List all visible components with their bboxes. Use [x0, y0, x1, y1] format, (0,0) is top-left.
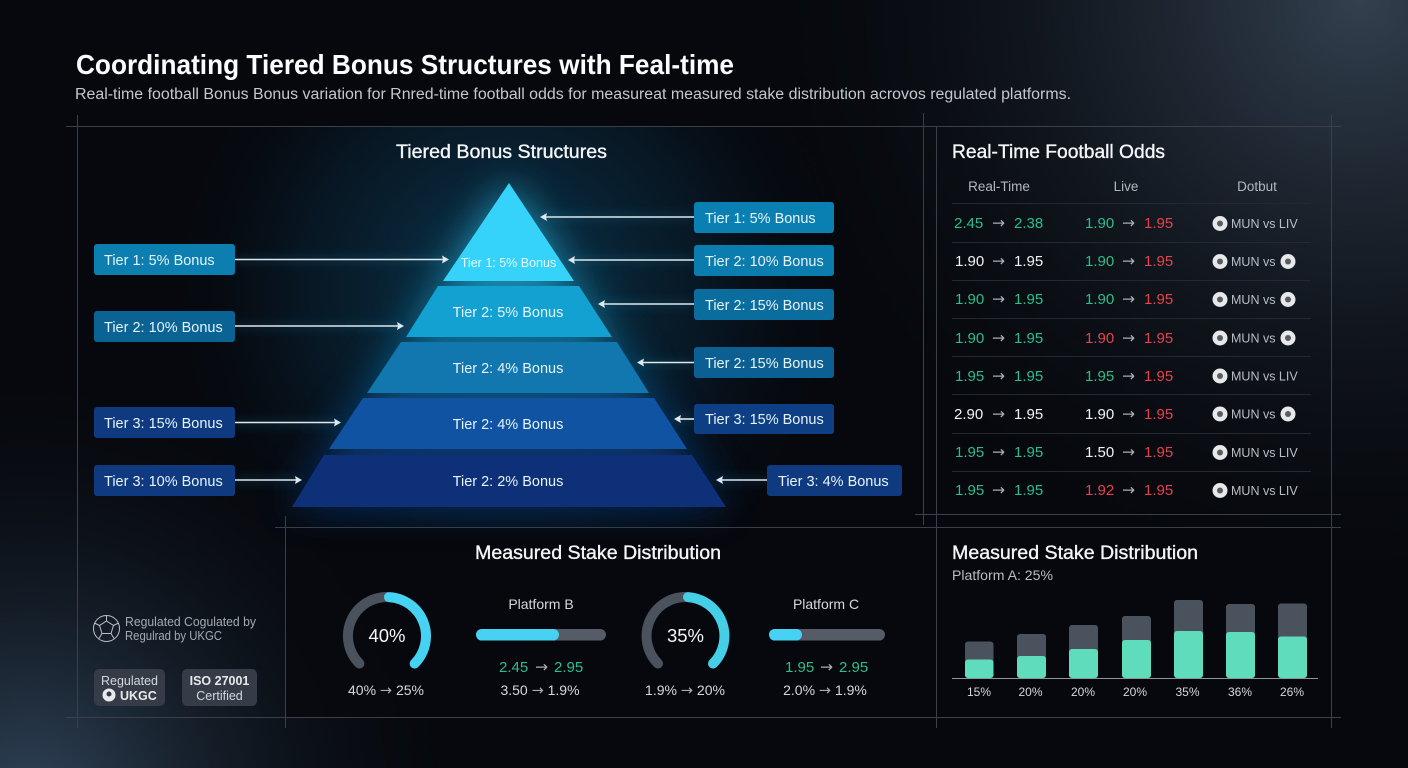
panel: tiered bonus structures: [94, 142, 902, 507]
subheading: platform A: Platform A: 25%: [952, 568, 1053, 583]
row 4: 1.90: [1085, 330, 1114, 347]
bar 1: [965, 642, 994, 699]
row 2: [955, 252, 1296, 270]
label: tier 2 left: [94, 311, 235, 342]
row 1: 1.90: [1085, 215, 1114, 232]
platform C bar: →: [820, 658, 833, 676]
label: tier 2 15 percent right: [694, 289, 834, 320]
platform B bar: 2.95: [554, 659, 583, 676]
row 7: →: [1122, 443, 1135, 461]
table header: Dotbut: [1237, 179, 1277, 194]
heading: tiered bonus structures: Tiered Bonus Structures: [396, 142, 607, 163]
label: tier 3 4 percent right: [767, 465, 902, 496]
platform B bar: 3.50 → 1.9%: [500, 682, 580, 699]
row 2: MUN vs: [1231, 255, 1275, 269]
label: tier 3 right: [694, 404, 834, 434]
badge: regulated UKGC: [94, 669, 165, 706]
gauge: 40 percent: [348, 597, 426, 699]
row 1: 1.95: [1144, 215, 1173, 232]
row 3: MUN vs: [1231, 293, 1275, 307]
panel: measured stake distribution gauges: [348, 543, 885, 699]
platform C bar: Platform C: [793, 596, 859, 612]
platform B bar: Platform B: [508, 596, 574, 612]
gauge: 35 percent: 35%: [667, 625, 704, 646]
label: tier 1 left: [94, 244, 235, 275]
bar 1: 15%: [967, 685, 991, 699]
row 8: →: [992, 481, 1005, 499]
row 2: 1.95: [1014, 253, 1043, 270]
row 8: [955, 481, 1298, 499]
row 2: 1.90: [1085, 253, 1114, 270]
subtitle: Real-time football Bonus Bonus variation for Rnred-time football odds for measureat measured stake distribution acrovos regulated platforms.: [75, 86, 1071, 103]
regulation text: Regulrad by UKGC: [125, 629, 222, 643]
panel: real-time football odds: [952, 142, 1311, 499]
icon: regulation emblem: [94, 616, 120, 642]
label: tier 2 left: Tier 2: 10% Bonus: [104, 320, 223, 336]
tier 4 layer: Tier 2: 4% Bonus: [453, 417, 563, 433]
table header: [968, 179, 1277, 194]
row 2: →: [1122, 252, 1135, 270]
heading: measured stake distribution: Measured Stake Distribution: [475, 543, 721, 564]
row 1: 2.45: [954, 215, 983, 232]
label: tier 1 right: [694, 202, 834, 233]
row 1: MUN vs LIV: [1231, 217, 1298, 231]
tier 5 layer: Tier 2: 2% Bonus: [453, 474, 563, 490]
gauge: 35 percent: [645, 597, 725, 699]
row 8: →: [1122, 481, 1135, 499]
platform C bar: 2.0% → 1.9%: [783, 682, 867, 699]
row 7: [955, 443, 1298, 461]
label: tier 2 15 percent right: Tier 2: 15% Bonus: [705, 298, 824, 314]
row 8: 1.92: [1085, 482, 1114, 499]
label: tier 3 4 percent right: Tier 3: 4% Bonus: [778, 474, 889, 490]
row 7: 1.95: [1144, 444, 1173, 461]
tier 2 layer: Tier 2: 5% Bonus: [453, 305, 563, 321]
row 4: 1.90: [955, 330, 984, 347]
row 6: 1.95: [1144, 406, 1173, 423]
row 3: 1.90: [1085, 291, 1114, 308]
bar 7: [1278, 604, 1307, 699]
platform C bar: 2.95: [839, 659, 868, 676]
label: tier 1 left: Tier 1: 5% Bonus: [104, 253, 215, 269]
row 2: 1.95: [1144, 253, 1173, 270]
row 5: 1.95: [1014, 368, 1043, 385]
bar 4: [1122, 616, 1151, 699]
left arrows: [235, 256, 449, 484]
row 7: MUN vs LIV: [1231, 446, 1298, 460]
platform B bar: →: [535, 658, 548, 676]
label: tier 3 left: Tier 3: 15% Bonus: [104, 416, 223, 432]
row 5: [955, 367, 1298, 385]
label: tier 2 10 percent right: [694, 245, 834, 276]
label: tier 2 15 percent lower right: Tier 2: 15% Bonus: [705, 356, 824, 372]
row 3: →: [992, 290, 1005, 308]
row 5: MUN vs LIV: [1231, 370, 1298, 384]
row 6: 1.90: [1085, 406, 1114, 423]
frame grid lines: [66, 113, 1341, 728]
row 3: [955, 290, 1296, 308]
tier 3 layer: Tier 2: 4% Bonus: [453, 361, 563, 377]
gauge: 40 percent: 40% → 25%: [348, 682, 424, 699]
row 4: →: [1122, 329, 1135, 347]
badge: regulated UKGC: UKGC: [120, 689, 157, 703]
right arrows: [540, 213, 767, 484]
row 3: 1.90: [955, 291, 984, 308]
row 1: →: [992, 214, 1005, 232]
panel: regulation badges: [94, 615, 257, 706]
row 3: →: [1122, 290, 1135, 308]
chart baseline: [952, 678, 1318, 680]
row 4: MUN vs: [1231, 332, 1275, 346]
row 6: →: [1122, 405, 1135, 423]
pyramid glow: [292, 183, 726, 507]
bar 5: [1174, 600, 1203, 699]
panel: measured stake distribution bar chart: [952, 543, 1318, 699]
bar 7: 26%: [1280, 685, 1304, 699]
table header: Live: [1114, 179, 1138, 194]
badge: ISO 27001 certified: [182, 669, 257, 706]
heading: real-time football odds: Real-Time Football Odds: [952, 142, 1165, 163]
label: tier 2 15 percent lower right: [694, 347, 834, 378]
platform C bar: 1.95: [785, 659, 814, 676]
row 6: 2.90: [954, 406, 983, 423]
row 7: 1.95: [955, 444, 984, 461]
label: tier 2 10 percent right: Tier 2: 10% Bonus: [705, 254, 824, 270]
row 7: 1.50: [1085, 444, 1114, 461]
row 8: 1.95: [1014, 482, 1043, 499]
tier 1 layer: Tier 1: 5% Bonus: [461, 256, 556, 270]
gauge: 40 percent: 40%: [368, 625, 406, 646]
bar 6: [1226, 604, 1255, 699]
regulation text: [125, 615, 257, 643]
arrow glow streaks: [235, 217, 767, 480]
label: tier 3 left: [94, 407, 235, 438]
bar 3: 20%: [1071, 685, 1095, 699]
row 1: 2.38: [1014, 215, 1043, 232]
row 3: 1.95: [1014, 291, 1043, 308]
row 7: 1.95: [1014, 444, 1043, 461]
row 8: 1.95: [955, 482, 984, 499]
row 5: 1.95: [955, 368, 984, 385]
bar 5: 35%: [1175, 685, 1200, 699]
row 2: →: [992, 252, 1005, 270]
platform C bar: [769, 596, 885, 699]
row 5: 1.95: [1144, 368, 1173, 385]
gauge: 35 percent: 1.9% → 20%: [645, 682, 725, 699]
row 7: →: [992, 443, 1005, 461]
title: Coordinating Tiered Bonus Structures with Feal-time: [76, 49, 734, 80]
bar 6: 36%: [1228, 685, 1252, 699]
row 6: [954, 405, 1296, 423]
row 4: [955, 329, 1296, 347]
platform B bar: 2.45: [499, 659, 528, 676]
label: tier 3 lower left: Tier 3: 10% Bonus: [104, 474, 223, 490]
table header: Real-Time: [968, 179, 1030, 194]
heading: measured stake distribution right: Measured Stake Distribution: [952, 543, 1198, 564]
row 4: 1.95: [1014, 330, 1043, 347]
row 6: →: [992, 405, 1005, 423]
tier 1 layer: [443, 183, 574, 281]
row 1: →: [1122, 214, 1135, 232]
label: tier 3 lower left: [94, 465, 235, 496]
row 4: →: [992, 329, 1005, 347]
bar 2: [1017, 634, 1046, 699]
label: tier 3 right: Tier 3: 15% Bonus: [705, 412, 824, 428]
row 3: 1.95: [1144, 291, 1173, 308]
tier 5 layer: [292, 455, 726, 507]
row 8: MUN vs LIV: [1231, 484, 1298, 498]
pyramid: [292, 183, 726, 507]
tier 2 layer: [406, 286, 612, 337]
tier 3 layer: [367, 342, 649, 393]
row 2: 1.90: [955, 253, 984, 270]
row 5: →: [1122, 367, 1135, 385]
table row lines: [952, 204, 1311, 472]
row 6: MUN vs: [1231, 408, 1275, 422]
badge: ISO 27001 certified: Certified: [196, 689, 243, 703]
tier 4 layer: [329, 398, 687, 449]
row 8: 1.95: [1144, 482, 1173, 499]
row 5: 1.95: [1085, 368, 1114, 385]
bar chart: [952, 600, 1318, 699]
row 5: →: [992, 367, 1005, 385]
badge: ISO 27001 certified: ISO 27001: [190, 674, 249, 688]
left labels: [94, 244, 235, 496]
row 1: [954, 214, 1298, 232]
bar 4: 20%: [1123, 685, 1147, 699]
row 4: 1.95: [1144, 330, 1173, 347]
bar 3: [1069, 625, 1098, 699]
platform B bar: [476, 596, 606, 699]
right labels: [694, 202, 902, 496]
regulation text: Regulated Cogulated by: [125, 615, 257, 629]
row 6: 1.95: [1014, 406, 1043, 423]
bar 2: 20%: [1018, 685, 1043, 699]
badge: regulated UKGC: Regulated: [101, 674, 158, 688]
label: tier 1 right: Tier 1: 5% Bonus: [705, 211, 816, 227]
